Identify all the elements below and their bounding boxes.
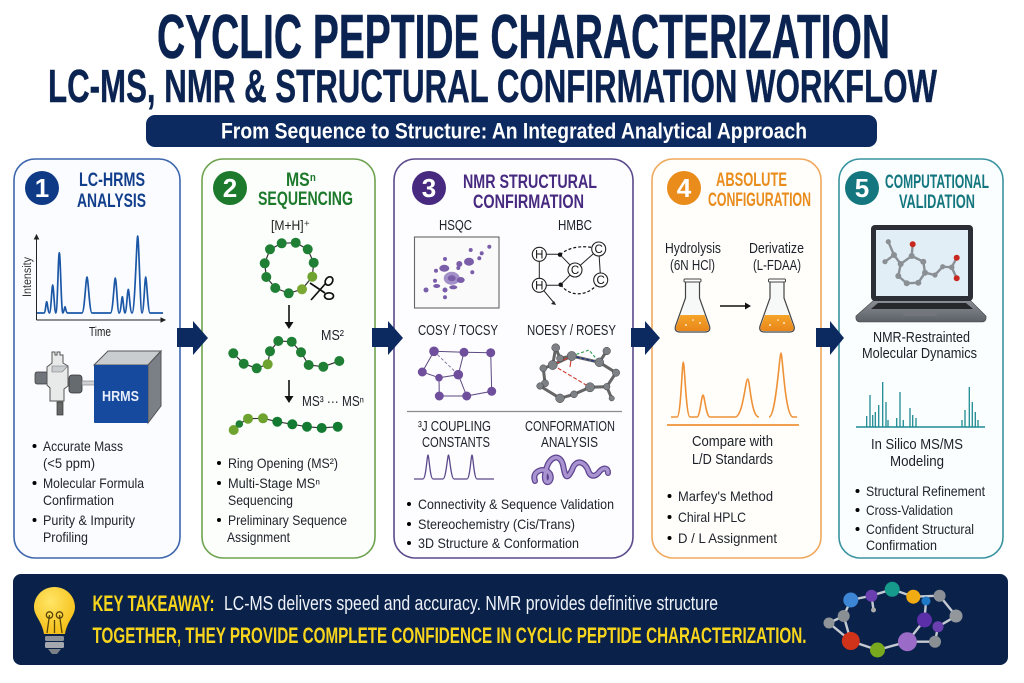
bullet list xyxy=(32,438,144,545)
bullet list: D / L Assignment xyxy=(678,530,777,546)
step badge 5: 5 xyxy=(855,173,869,203)
HMBC diagram: H xyxy=(535,280,543,292)
panel: LC-HRMS analysis xyxy=(14,159,180,558)
step badge 3 xyxy=(412,171,446,205)
step badge 1 xyxy=(25,171,59,205)
icon: light bulb xyxy=(34,587,75,654)
axis label: time: Time xyxy=(89,325,111,339)
heading: CONFIRMATION xyxy=(473,192,584,213)
NOESY molecule xyxy=(537,344,620,403)
chromatogram xyxy=(22,235,165,339)
panel: computational validation xyxy=(839,159,1003,558)
panel: MSn sequencing xyxy=(202,159,375,558)
MS/MS stick spectrum xyxy=(856,382,985,427)
bullet list: Structural Refinement xyxy=(866,483,985,499)
subtitle pill: From Sequence to Structure: An Integrated Analytical Approach xyxy=(221,118,807,144)
heading xyxy=(463,172,597,213)
label: conformation analysis: CONFORMATION xyxy=(525,419,615,435)
panel: NMR structural confirmation xyxy=(394,159,633,558)
step badge 4 xyxy=(667,171,701,205)
bullet list: Marfey's Method xyxy=(678,488,773,504)
icon: LC valve xyxy=(35,352,95,415)
step badge 2 xyxy=(213,171,247,205)
bullet list: Connectivity & Sequence Validation xyxy=(418,496,614,512)
bullet list: Multi-Stage MSⁿ xyxy=(228,475,320,491)
label: MS3 to MSn: MS³ ··· MSⁿ xyxy=(302,394,364,410)
HMBC diagram: C xyxy=(597,275,605,287)
heading xyxy=(708,170,811,211)
label: conformation analysis: ANALYSIS xyxy=(541,435,598,451)
key takeaway banner xyxy=(13,574,1008,665)
bullet list: Ring Opening (MS²) xyxy=(228,455,338,471)
bullet list: Accurate Mass xyxy=(43,438,123,454)
label: NMR-restrained MD xyxy=(862,330,977,362)
arrow 2 to 3 xyxy=(372,321,403,355)
COSY network xyxy=(418,346,496,400)
bullet list: Molecular Formula xyxy=(43,475,144,491)
step badge 4: 4 xyxy=(677,173,692,203)
label: hydrolysis xyxy=(665,241,721,274)
label: COSY / TOCSY: COSY / TOCSY xyxy=(418,323,498,339)
HSQC spectrum xyxy=(414,237,499,308)
heading: CONFIGURATION xyxy=(708,190,811,211)
label: 3J coupling constants xyxy=(418,419,491,451)
heading: VALIDATION xyxy=(899,192,975,213)
heading xyxy=(885,172,989,213)
panel: absolute configuration xyxy=(652,159,821,558)
arrow down xyxy=(288,305,290,323)
bullet list: Sequencing xyxy=(228,492,293,508)
heading: ABSOLUTE xyxy=(716,170,787,191)
label: NMR-restrained MD: NMR-Restrainted xyxy=(873,330,970,346)
label: NOESY / ROESY: NOESY / ROESY xyxy=(527,323,616,339)
bullet list: 3D Structure & Conformation xyxy=(418,535,579,551)
label: precursor ion: [M+H]⁺ xyxy=(271,218,310,233)
step badge 2: 2 xyxy=(223,173,237,203)
label: 3J coupling constants: ³J COUPLING xyxy=(418,419,491,435)
arrow 3 to 4 xyxy=(631,321,660,355)
label: NMR-restrained MD: Molecular Dynamics xyxy=(862,346,977,362)
arrow down xyxy=(288,380,290,397)
heading: NMR STRUCTURAL xyxy=(463,172,597,193)
bullet list: Cross-Validation xyxy=(866,502,953,518)
heading: LC-HRMS xyxy=(79,170,145,191)
step badge 5 xyxy=(845,171,879,205)
bullet list: Confirmation xyxy=(866,537,937,553)
opened peptide chain xyxy=(228,336,344,373)
heading xyxy=(77,170,146,212)
label: compare with standards: Compare with xyxy=(692,434,773,450)
icon: flask left xyxy=(675,279,710,332)
bullet list xyxy=(668,488,777,546)
label: derivatize: Derivatize xyxy=(749,241,804,257)
heading: ANALYSIS xyxy=(77,191,146,212)
molecule on screen xyxy=(882,239,960,286)
coupling multiplet xyxy=(414,455,494,479)
HMBC diagram xyxy=(532,242,608,305)
label: in silico modeling xyxy=(871,437,963,470)
bullet list xyxy=(407,496,614,551)
heading xyxy=(258,170,353,210)
HMBC diagram: C xyxy=(595,244,603,256)
HMBC diagram: H xyxy=(535,250,543,262)
bullet list: Preliminary Sequence xyxy=(228,512,347,528)
label: 3J coupling constants: CONSTANTS xyxy=(422,435,490,451)
bullet list: Confident Structural xyxy=(866,521,974,537)
step badge 3: 3 xyxy=(422,173,436,203)
bullet list xyxy=(856,483,985,553)
fragment chain xyxy=(229,413,343,435)
axis label: intensity: Intensity xyxy=(22,257,34,297)
HMBC diagram: C xyxy=(571,265,579,277)
label: HSQC: HSQC xyxy=(439,218,472,234)
ball-and-stick cyclic peptide xyxy=(824,582,962,658)
label: compare with standards xyxy=(692,434,773,468)
chiral chromatogram xyxy=(667,353,799,425)
label: hydrolysis: (6N HCl) xyxy=(670,258,715,274)
cyclic peptide ring xyxy=(260,238,319,298)
bullet list xyxy=(217,455,347,545)
label: derivatize: (L-FDAA) xyxy=(753,258,801,274)
bullet list: Assignment xyxy=(227,529,290,545)
icon: laptop xyxy=(856,225,986,322)
label: hydrolysis: Hydrolysis xyxy=(665,241,721,257)
icon: flask right xyxy=(760,279,794,332)
takeaway label: KEY TAKEAWAY: xyxy=(92,591,214,616)
label: compare with standards: L/D Standards xyxy=(692,452,773,468)
label: conformation analysis xyxy=(525,419,615,451)
arrow 4 to 5 xyxy=(816,321,844,355)
step badge 1: 1 xyxy=(35,173,49,203)
bullet list: (<5 ppm) xyxy=(43,455,95,471)
label: in silico modeling: Modeling xyxy=(890,454,944,470)
takeaway line 1: LC-MS delivers speed and accuracy. NMR provides definitive structure xyxy=(224,593,718,615)
icon: HRMS box xyxy=(94,351,161,423)
label: HMBC: HMBC xyxy=(558,218,592,234)
bullet list: Stereochemistry (Cis/Trans) xyxy=(418,516,575,532)
heading: MSⁿ xyxy=(286,170,316,191)
conformation ribbon xyxy=(534,458,608,482)
arrow 1 to 2 xyxy=(177,321,208,355)
label: derivatize xyxy=(749,241,804,274)
bullet list: Profiling xyxy=(43,529,88,545)
arrow: flask to flask xyxy=(720,302,751,310)
bullet list: Confirmation xyxy=(43,492,114,508)
label: in silico modeling: In Silico MS/MS xyxy=(871,437,963,453)
subtitle pill xyxy=(146,115,877,147)
heading: SEQUENCING xyxy=(258,189,353,210)
icon: scissors xyxy=(310,275,334,300)
icon: HRMS box: HRMS xyxy=(102,388,139,405)
bullet list: Chiral HPLC xyxy=(678,509,746,525)
label: MS2: MS² xyxy=(321,328,344,344)
bullet list: Purity & Impurity xyxy=(43,512,135,528)
